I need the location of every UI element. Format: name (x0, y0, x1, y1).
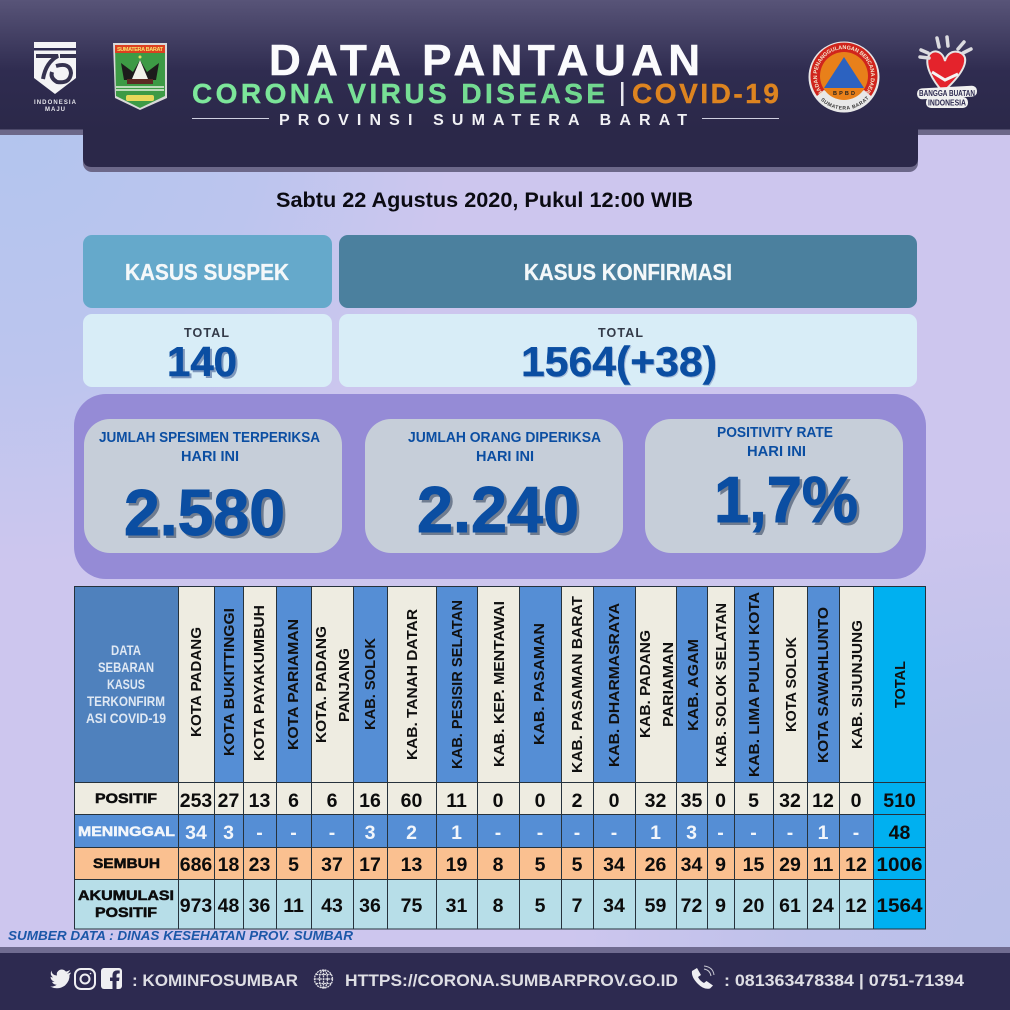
footer band (0, 947, 1010, 1010)
row: meninggal: - (495, 822, 501, 844)
row: sembuh: 15 (743, 854, 764, 876)
row: meninggal: 2 (406, 822, 417, 844)
card: positivity rate: HARI INI (747, 444, 806, 460)
logo: Bangga Buatan Indonesia (917, 37, 977, 108)
row: akumulasi positif: 7 (572, 895, 582, 917)
table corner heading: DATA (111, 643, 141, 658)
icon: instagram (75, 969, 95, 989)
row: positif: 32 (779, 790, 801, 812)
row: sembuh: 5 (572, 854, 583, 876)
card: jumlah spesimen (84, 419, 342, 553)
row: sembuh: 12 (845, 854, 867, 876)
row: meninggal: - (537, 822, 543, 844)
panel: daily statistics (74, 394, 926, 579)
row: sembuh: 1006 (876, 854, 923, 876)
table column headings: KOTA PADANG (188, 627, 205, 737)
row: meninggal: - (329, 822, 335, 844)
title divider (621, 82, 624, 106)
title (192, 36, 779, 129)
table column headings: KAB. SIJUNJUNG (849, 620, 866, 749)
table column headings: KAB. SOLOK SELATAN (713, 603, 730, 767)
table column headings: KAB. PASAMAN BARAT (569, 596, 586, 773)
card: jumlah spesimen: 2.580 (124, 476, 285, 549)
table corner heading: SEBARAN (98, 660, 154, 675)
row: positif: 6 (327, 790, 338, 812)
row: meninggal: MENINGGAL (78, 824, 175, 839)
row: akumulasi positif: 36 (359, 895, 381, 917)
row: positif: 13 (249, 790, 270, 812)
row: positif: 0 (535, 790, 546, 812)
row: akumulasi positif: 973 (180, 895, 212, 917)
table corner heading: ASI COVID-19 (86, 711, 166, 726)
row: sembuh: 19 (446, 854, 467, 876)
row: meninggal: - (787, 822, 793, 844)
row: meninggal: - (853, 822, 859, 844)
table column headings: KAB. PASAMAN (531, 623, 548, 745)
row: meninggal: - (256, 822, 263, 844)
table corner heading (86, 643, 166, 726)
row: sembuh: 34 (681, 854, 702, 876)
row: akumulasi positif: POSITIF (95, 905, 157, 920)
row: positif: 0 (493, 790, 504, 812)
icon: twitter (50, 970, 71, 988)
logo: Bangga Buatan Indonesia: BANGGA BUATAN (919, 89, 975, 98)
table column headings: KOTA BUKITTINGGI (221, 608, 238, 756)
row: sembuh: 17 (359, 854, 381, 876)
footer text: website: HTTPS://CORONA.SUMBARPROV.GO.ID (345, 972, 678, 990)
number: 140: 140 (167, 338, 237, 385)
logo: BPBD: BPBD (833, 91, 855, 97)
row: akumulasi positif: 8 (493, 895, 504, 917)
table column headings (188, 592, 909, 777)
logo: 75 Indonesia Maju: MAJU (45, 107, 65, 113)
table column headings: KAB. TANAH DATAR (404, 609, 421, 760)
row: positif: 16 (359, 790, 381, 812)
table column headings: KAB. KEP. MENTAWAI (491, 601, 508, 767)
row: positif: 253 (180, 790, 212, 812)
table column headings: KAB. PESISIR SELATAN (449, 600, 466, 769)
row: meninggal: 3 (686, 822, 697, 844)
card: jumlah orang: 2.240 (417, 473, 579, 546)
card: jumlah orang (365, 419, 623, 553)
logo: 75 Indonesia Maju (34, 42, 77, 113)
row: positif: 0 (609, 790, 620, 812)
logo: BPBD (808, 42, 880, 112)
row: akumulasi positif: 5 (535, 895, 546, 917)
row: positif: 60 (401, 790, 422, 812)
row: akumulasi positif: 24 (812, 895, 834, 917)
card: jumlah spesimen: 2.580 (126, 478, 288, 552)
table column headings: KAB. SOLOK (362, 638, 379, 730)
number: 1564(+38): 1564(+38) (522, 339, 718, 386)
icon: globe (314, 970, 332, 988)
row: positif: 12 (812, 790, 834, 812)
row: positif: 510 (883, 790, 916, 812)
table column headings: TOTAL (892, 661, 909, 708)
row: sembuh: 18 (218, 854, 239, 876)
title line: Data Pantauan: DATA PANTAUAN (269, 36, 700, 85)
table column headings: KOTA SAWAHLUNTO (815, 607, 832, 763)
row: sembuh: SEMBUH (93, 856, 160, 871)
row: sembuh (93, 854, 923, 876)
row: meninggal: - (717, 822, 724, 844)
row: sembuh: 23 (249, 854, 270, 876)
row: meninggal: 3 (223, 822, 234, 844)
card: positivity rate: 1,7% (714, 463, 858, 536)
panel: kasus suspek header: KASUS SUSPEK (125, 259, 289, 285)
panel: kasus konfirmasi header (339, 235, 917, 308)
table column headings: PARIAMAN (660, 642, 677, 727)
logo: Sumatera Barat shield (113, 43, 167, 110)
title line: COVID-19: COVID-19 (632, 78, 779, 109)
card: positivity rate: POSITIVITY RATE (717, 425, 833, 441)
table column headings: KAB. DHARMASRAYA (606, 603, 623, 767)
row: meninggal: - (290, 822, 297, 844)
row: akumulasi positif: 43 (321, 895, 343, 917)
logo: BPBD: SUMATERA BARAT (821, 96, 868, 110)
footer text: social handle: : KOMINFOSUMBAR (132, 972, 298, 990)
row: akumulasi positif: 59 (645, 895, 666, 917)
row: sembuh: 37 (321, 854, 343, 876)
row: positif: 27 (218, 790, 239, 812)
row: meninggal (78, 822, 910, 844)
table column headings: KAB. LIMA PULUH KOTA (746, 592, 763, 777)
label: total suspek: TOTAL (184, 326, 229, 340)
row: positif: 32 (645, 790, 666, 812)
row: sembuh: 13 (401, 854, 422, 876)
row: sembuh: 11 (813, 854, 833, 876)
row: sembuh: 686 (180, 854, 212, 876)
number: 140: 140 (169, 340, 239, 387)
row: akumulasi positif: 9 (715, 895, 726, 917)
row: sembuh: 5 (288, 854, 299, 876)
card: positivity rate: 1,7% (716, 466, 860, 538)
row: akumulasi positif: AKUMULASI (78, 888, 174, 903)
row: sembuh: 34 (603, 854, 625, 876)
row: positif: 0 (715, 790, 726, 812)
row: meninggal: 34 (185, 822, 207, 844)
number: 1564(+38): 1564(+38) (521, 338, 717, 385)
table column headings: KOTA PAYAKUMBUH (251, 605, 268, 761)
row: sembuh: 5 (535, 854, 546, 876)
row: positif: 6 (288, 790, 299, 812)
table: sebaran kasus (74, 586, 926, 929)
table column headings: KAB. AGAM (685, 639, 702, 731)
card: positivity rate (645, 419, 903, 553)
row: meninggal: 1 (451, 822, 462, 844)
table column headings: KOTA PARIAMAN (285, 619, 302, 750)
icon: phone (692, 966, 714, 989)
row: sembuh: 29 (779, 854, 801, 876)
row: sembuh: 9 (715, 854, 726, 876)
panel: kasus suspek header (83, 235, 332, 308)
row: akumulasi positif: 75 (401, 895, 422, 917)
row: meninggal: 1 (818, 822, 829, 844)
row: akumulasi positif: 20 (743, 895, 764, 917)
row: meninggal: 48 (889, 822, 910, 844)
source note: SUMBER DATA : DINAS KESEHATAN PROV. SUMBAR (8, 928, 354, 943)
logo: 75 Indonesia Maju: INDONESIA (34, 100, 77, 106)
row: akumulasi positif: 61 (779, 895, 801, 917)
row: sembuh: 8 (493, 854, 504, 876)
title line: Corona Virus Disease: CORONA VIRUS DISEASE (192, 78, 605, 109)
row: akumulasi positif: 36 (249, 895, 270, 917)
row: meninggal: - (574, 822, 580, 844)
row: positif: POSITIF (95, 791, 157, 806)
card: jumlah orang: JUMLAH ORANG DIPERIKSA (408, 430, 602, 446)
logo: Sumatera Barat shield: SUMATERA BARAT (117, 47, 164, 53)
panel: konfirmasi total (339, 314, 917, 387)
row: akumulasi positif: 1564 (876, 895, 923, 917)
row: akumulasi positif (78, 888, 923, 920)
row: akumulasi positif: 72 (681, 895, 702, 917)
header band (0, 0, 1010, 172)
row: akumulasi positif: 12 (845, 895, 867, 917)
label: total konfirmasi: TOTAL (598, 326, 643, 340)
card: jumlah orang: HARI INI (476, 449, 534, 465)
row: meninggal: - (611, 822, 617, 844)
row: positif (95, 790, 916, 812)
row: akumulasi positif: 48 (218, 895, 239, 917)
card: jumlah orang: 2.240 (420, 476, 582, 548)
logo: Bangga Buatan Indonesia: INDONESIA (928, 98, 966, 108)
row: akumulasi positif: 11 (283, 895, 304, 917)
row: meninggal: 1 (650, 822, 661, 844)
panel: kasus konfirmasi header: KASUS KONFIRMASI (524, 259, 732, 285)
row: meninggal: - (750, 822, 757, 844)
table column headings: KOTA SOLOK (783, 637, 800, 732)
row: positif: 0 (851, 790, 862, 812)
row: sembuh: 26 (645, 854, 666, 876)
table column headings: KAB. PADANG (637, 630, 654, 738)
footer text: phone numbers: : 081363478384 | 0751-71394 (724, 972, 965, 990)
title line: Provinsi Sumatera Barat: PROVINSI SUMATERA BARAT (279, 112, 687, 129)
card: jumlah spesimen: JUMLAH SPESIMEN TERPERIKSA (99, 430, 320, 446)
table column headings: KOTA. PADANG (313, 626, 330, 743)
row: positif: 35 (681, 790, 702, 812)
table corner heading: TERKONFIRM (87, 694, 165, 709)
table corner heading: KASUS (107, 677, 145, 692)
row: meninggal: 3 (365, 822, 376, 844)
icon: facebook (101, 968, 122, 989)
row: positif: 11 (446, 790, 467, 812)
date line: Sabtu 22 Agustus 2020, Pukul 12:00 WIB (276, 189, 693, 212)
panel: suspek total (83, 314, 332, 387)
row: positif: 2 (572, 790, 583, 812)
row: akumulasi positif: 31 (446, 895, 467, 917)
table column headings: PANJANG (336, 648, 353, 722)
card: jumlah spesimen: HARI INI (181, 449, 239, 465)
row: akumulasi positif: 34 (603, 895, 625, 917)
row: positif: 5 (748, 790, 759, 812)
